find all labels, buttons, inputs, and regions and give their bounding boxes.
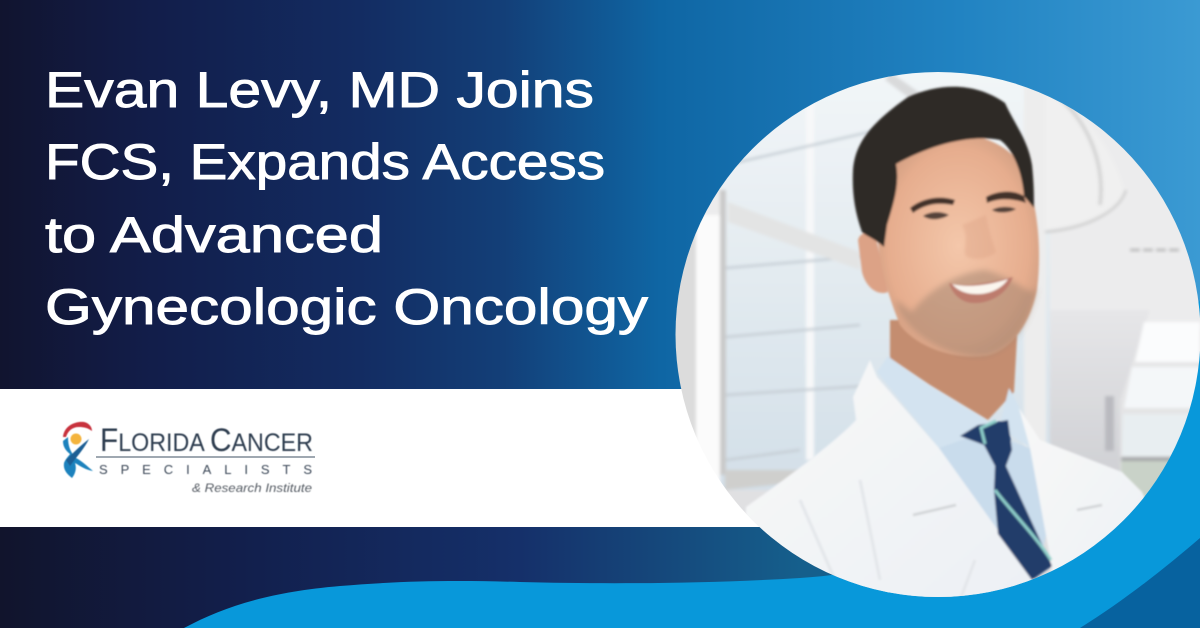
window panes (721, 304, 1050, 490)
light blue wave (184, 300, 1200, 628)
necktie (960, 420, 1052, 580)
eyebrows (910, 198, 955, 213)
logo subtitle: SPECIALISTS (99, 462, 312, 477)
bottom dark band (0, 527, 900, 628)
logo: Florida Cancer Specialists (63, 422, 315, 495)
coat pocket detail (913, 505, 1102, 515)
collar (877, 356, 995, 448)
white logo band (0, 389, 900, 527)
portrait photo in circle (670, 60, 1200, 610)
tie stripes (981, 421, 1051, 560)
title: Evan Levy, MD Joins (45, 62, 594, 118)
ceiling arches (885, 76, 919, 97)
title: Gynecologic Oncology (45, 279, 648, 335)
shirt (940, 437, 1046, 545)
photo backdrop (670, 60, 1200, 600)
nose shadow (964, 218, 994, 258)
doctor figure (740, 87, 1160, 610)
beard shadow (896, 270, 1037, 356)
hair (853, 87, 1034, 247)
neck (890, 320, 1018, 420)
title: FCS, Expands Access (45, 134, 605, 190)
logo divider (96, 456, 315, 458)
ear (858, 233, 888, 293)
face (878, 134, 1039, 357)
logo wordmark: FLORIDA CANCER (100, 422, 313, 458)
window beam (728, 202, 860, 270)
lab coat (740, 360, 1040, 610)
title: to Advanced (45, 207, 383, 263)
right windows (1135, 322, 1200, 362)
logo tagline: & Research Institute (192, 481, 312, 495)
dark blue corner wave (1080, 538, 1200, 628)
eyes (923, 212, 949, 219)
smile (949, 277, 1013, 303)
icon: ribbon figure (63, 422, 93, 478)
title (45, 62, 648, 335)
